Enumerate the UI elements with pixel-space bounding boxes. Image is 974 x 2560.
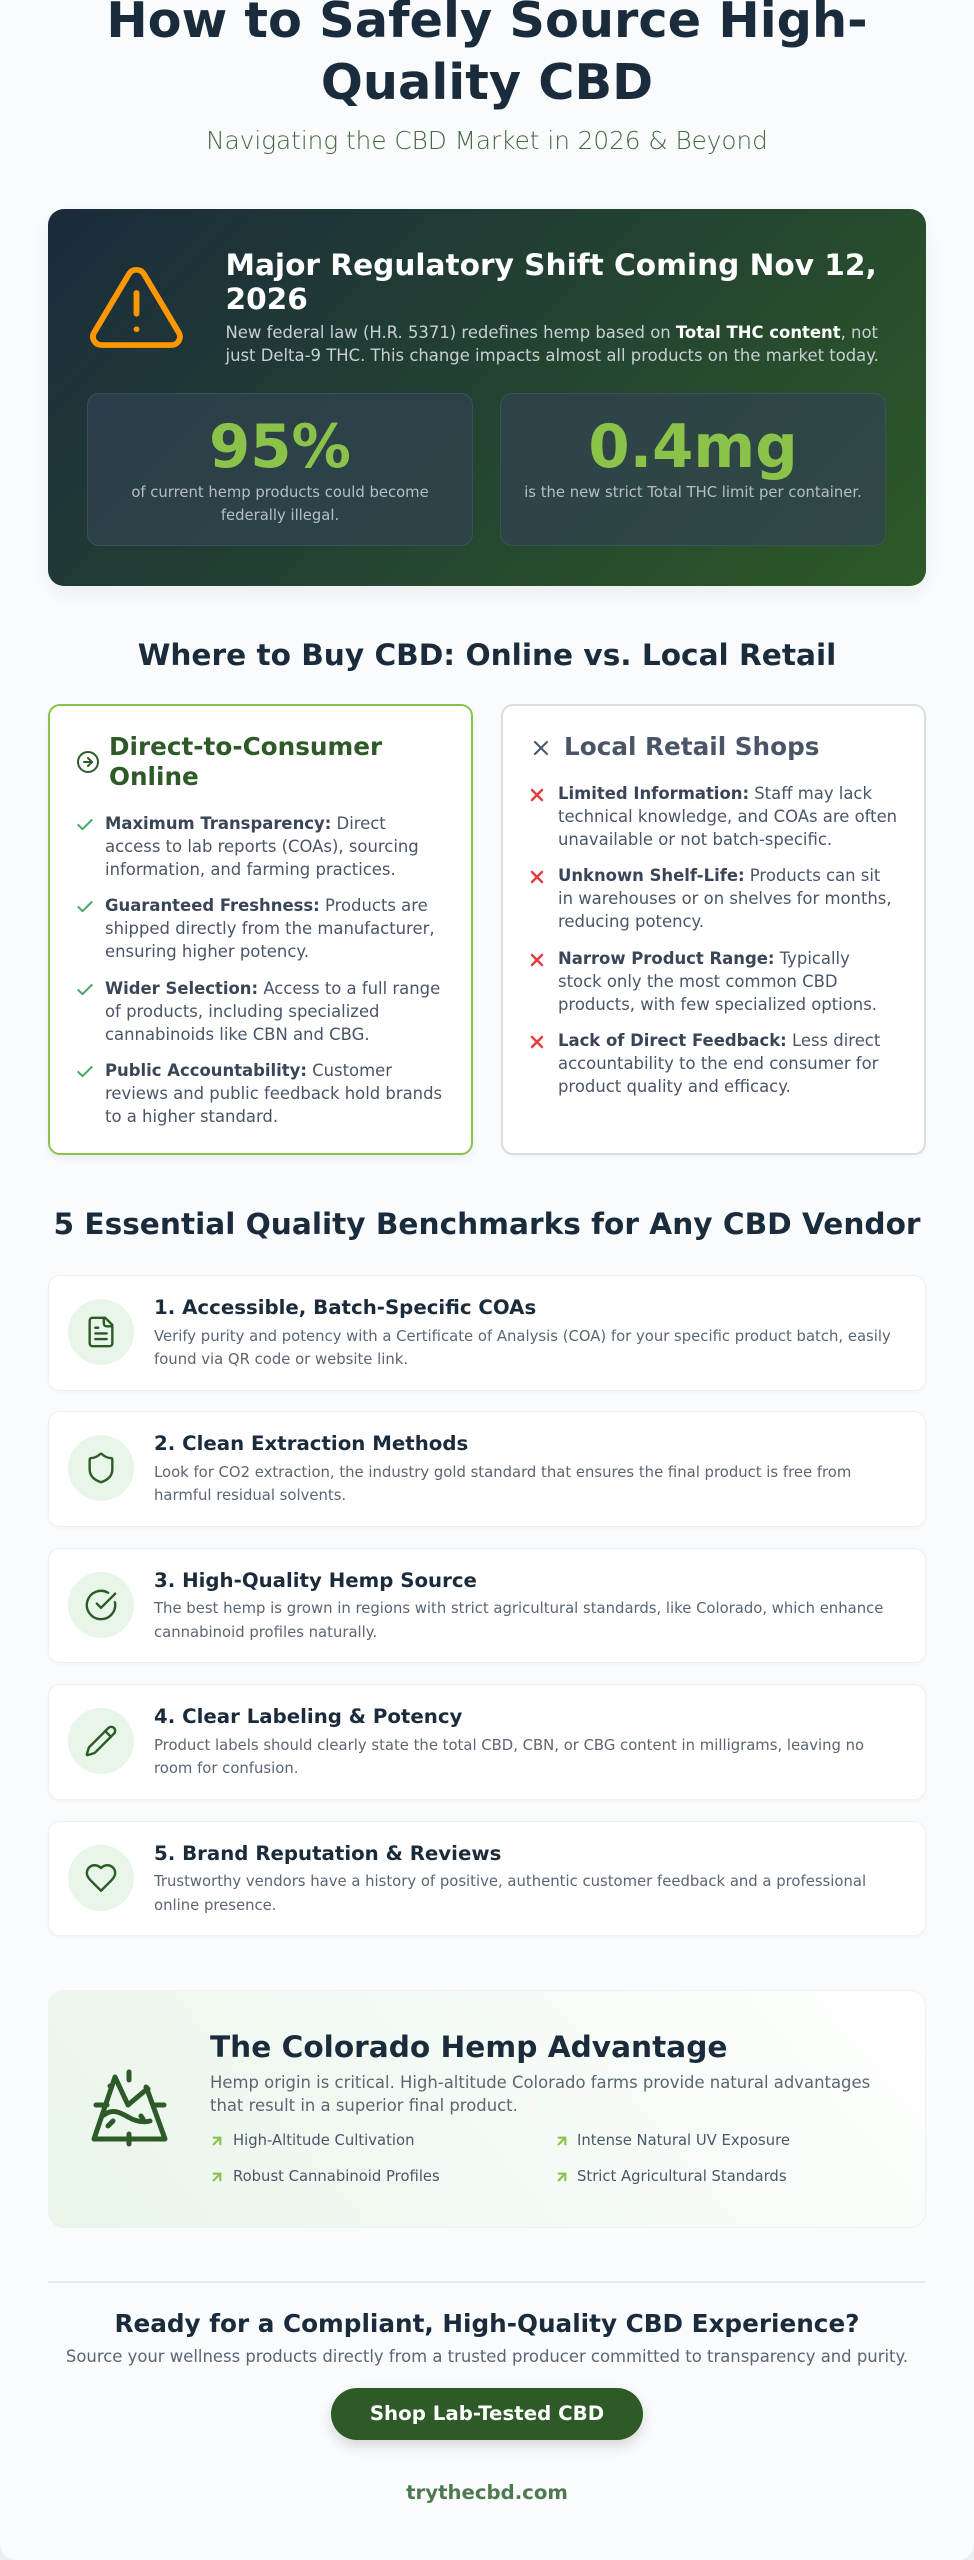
- icon: mountain: [92, 2070, 168, 2146]
- benchmark title: 2. Clean Extraction Methods: [154, 1432, 468, 1455]
- benchmark description: [154, 1873, 866, 1914]
- alert text: [225, 323, 879, 365]
- benefit: freshness: shipped directly from the manufacturer,: [105, 919, 435, 938]
- feature: standards: Strict Agricultural Standards: [577, 2168, 787, 2185]
- title: Quality CBD: [321, 53, 653, 111]
- drawback: feedback: Lack of Direct Feedback: Less direct: [558, 1031, 880, 1050]
- drawback: shelf-life: in warehouses or on shelves for months,: [558, 889, 892, 908]
- icon: cross: [530, 788, 544, 802]
- card: benchmark 3: [48, 1548, 926, 1663]
- panel: direct-to-consumer online: [48, 704, 473, 1155]
- stat value: 0.4mg: [588, 412, 798, 481]
- panel: colorado hemp advantage: [48, 1990, 926, 2228]
- benchmark description: Product labels should clearly state the total CBD, CBN, or CBG content in milligrams, leaving no: [154, 1737, 864, 1754]
- feature: altitude: High-Altitude Cultivation: [233, 2132, 414, 2149]
- icon: cross: [530, 954, 544, 966]
- column heading: Local Retail Shops: [564, 732, 819, 761]
- icon: arrow circle: [77, 751, 99, 773]
- icon: check: [77, 901, 93, 912]
- icon: check: [77, 1066, 93, 1078]
- icon: check: [77, 984, 93, 996]
- benchmark description: room for confusion.: [154, 1760, 298, 1777]
- benchmark description: harmful residual solvents.: [154, 1487, 346, 1504]
- stat: 0.4mg: [500, 393, 886, 546]
- drawback: information: unavailable or not batch-specific.: [558, 830, 832, 849]
- card: benchmark 2: [48, 1411, 926, 1527]
- heading: where to buy: Where to Buy CBD: Online vs. Local Retail: [138, 638, 836, 672]
- benchmark description: [154, 1600, 883, 1641]
- icon: cross: [530, 870, 544, 884]
- icon: circle check: [68, 1572, 134, 1638]
- drawback: range: stock only the most common CBD: [558, 972, 838, 991]
- icon: shield: [68, 1435, 134, 1501]
- subtitle: Navigating the CBD Market in 2026 & Beyond: [206, 126, 768, 155]
- benefit: transparency: Maximum Transparency: Direct: [105, 814, 386, 833]
- benchmark description: The best hemp is grown in regions with strict agricultural standards, like Colorado, which enhance: [154, 1600, 883, 1617]
- panel text: [210, 2073, 870, 2115]
- panel heading: The Colorado Hemp Advantage: [210, 2030, 728, 2064]
- benchmark description: [154, 1328, 891, 1368]
- benefit: freshness: Guaranteed Freshness: Products are: [105, 896, 428, 915]
- column heading: [109, 732, 382, 791]
- drawback: information: Limited Information: Staff may lack: [558, 784, 872, 803]
- benefit: selection: Wider Selection: Access to a full range: [105, 979, 440, 998]
- drawback: feedback: product quality and efficacy.: [558, 1077, 791, 1096]
- stat caption: is the new strict Total THC limit per container.: [524, 484, 862, 501]
- feature: cannabinoids: Robust Cannabinoid Profiles: [233, 2168, 440, 2185]
- benefit: transparency: access to lab reports (COAs), sourcing: [105, 837, 419, 856]
- icon: pencil: [68, 1708, 134, 1774]
- drawback: shelf-life: Unknown Shelf-Life: Products can sit: [558, 866, 880, 885]
- drawback: feedback: accountability to the end consumer for: [558, 1054, 878, 1073]
- benefit: transparency: information, and farming practices.: [105, 860, 396, 879]
- benefit: selection: [105, 979, 440, 1044]
- benefit: freshness: [105, 896, 435, 961]
- benefit: accountability: Public Accountability: Customer: [105, 1061, 392, 1080]
- heading: call to action: Ready for a Compliant, High-Quality CBD Experience?: [114, 2309, 860, 2338]
- card: benchmark 5: [48, 1821, 926, 1936]
- icon: arrow: [212, 2136, 222, 2146]
- stat caption: federally illegal.: [221, 507, 339, 524]
- benefit: selection: of products, including specialized: [105, 1002, 380, 1021]
- benchmark description: found via QR code or website link.: [154, 1351, 408, 1368]
- stat caption: of current hemp products could become: [131, 484, 429, 501]
- icon: warning triangle: [90, 267, 183, 348]
- footer: site name: trythecbd.com: [406, 2481, 568, 2504]
- icon: document: [68, 1299, 134, 1365]
- drawback: shelf-life: [558, 866, 892, 931]
- icon: arrow: [558, 2172, 566, 2182]
- alert heading: 2026: [226, 282, 308, 316]
- benchmark title: 5. Brand Reputation & Reviews: [154, 1842, 501, 1865]
- benefit: freshness: ensuring higher potency.: [105, 942, 309, 961]
- drawback: range: [558, 949, 877, 1014]
- column heading: Online: [109, 762, 199, 791]
- alert text: just Delta-9 THC. This change impacts almost all products on the market today.: [226, 346, 879, 365]
- stat caption: [131, 484, 429, 524]
- benchmark title: 3. High-Quality Hemp Source: [154, 1569, 477, 1592]
- benefit: accountability: reviews and public feedback hold brands: [105, 1084, 442, 1103]
- button: shop: Shop Lab-Tested CBD: [370, 2402, 604, 2425]
- icon: arrow: [212, 2172, 222, 2182]
- benchmark description: [154, 1464, 851, 1504]
- panel text: that result in a superior final product.: [210, 2096, 518, 2115]
- icon: arrow: [558, 2136, 566, 2146]
- icon: cross: [530, 1036, 544, 1048]
- benchmark description: [154, 1737, 864, 1777]
- card: benchmark 1: [48, 1275, 926, 1391]
- drawback: information: [558, 784, 897, 849]
- drawback: feedback: [558, 1031, 880, 1096]
- button: shop: [331, 2388, 643, 2440]
- alert heading: Major Regulatory Shift Coming Nov 12,: [226, 248, 877, 282]
- benchmark description: Trustworthy vendors have a history of positive, authentic customer feedback and a professional: [154, 1873, 866, 1890]
- benchmark description: cannabinoid profiles naturally.: [154, 1624, 377, 1641]
- panel text: Hemp origin is critical. High-altitude Colorado farms provide natural advantages: [210, 2073, 870, 2092]
- icon: check: [77, 819, 93, 830]
- benefit: selection: cannabinoids like CBN and CBG.: [105, 1025, 370, 1044]
- benchmark description: online presence.: [154, 1896, 276, 1914]
- panel: regulatory alert: [48, 209, 926, 586]
- benchmark title: 4. Clear Labeling & Potency: [154, 1705, 462, 1728]
- benchmark description: Verify purity and potency with a Certificate of Analysis (COA) for your specific product batch, easily: [154, 1328, 891, 1344]
- heading: quality benchmarks: 5 Essential Quality Benchmarks for Any CBD Vendor: [53, 1207, 921, 1241]
- alert text: New federal law (H.R. 5371) redefines hemp based on Total THC content, not: [226, 323, 878, 342]
- stat: 95%: [87, 393, 473, 546]
- drawback: range: products, with few specialized options.: [558, 995, 877, 1014]
- alert heading: [226, 248, 877, 316]
- drawback: range: Narrow Product Range: Typically: [558, 949, 850, 968]
- title: [106, 0, 868, 111]
- icon: x mark: [534, 741, 548, 755]
- benchmark description: Look for CO2 extraction, the industry gold standard that ensures the final product is free from: [154, 1464, 851, 1481]
- card: benchmark 4: [48, 1684, 926, 1800]
- benefit: transparency: [105, 814, 419, 879]
- drawback: information: technical knowledge, and COAs are often: [558, 807, 897, 826]
- drawback: shelf-life: reducing potency.: [558, 912, 704, 931]
- feature: UV: Intense Natural UV Exposure: [577, 2132, 790, 2149]
- text: call to action: Source your wellness products directly from a trusted producer committed to transparency and purity.: [66, 2347, 908, 2366]
- column heading: Direct-to-Consumer: [109, 732, 382, 761]
- benefit: accountability: [105, 1061, 442, 1126]
- panel: local retail shops: [501, 704, 926, 1155]
- benefit: accountability: to a higher standard.: [105, 1107, 278, 1126]
- benchmark title: 1. Accessible, Batch-Specific COAs: [154, 1296, 536, 1319]
- icon: heart: [68, 1845, 134, 1911]
- stat value: 95%: [209, 412, 351, 481]
